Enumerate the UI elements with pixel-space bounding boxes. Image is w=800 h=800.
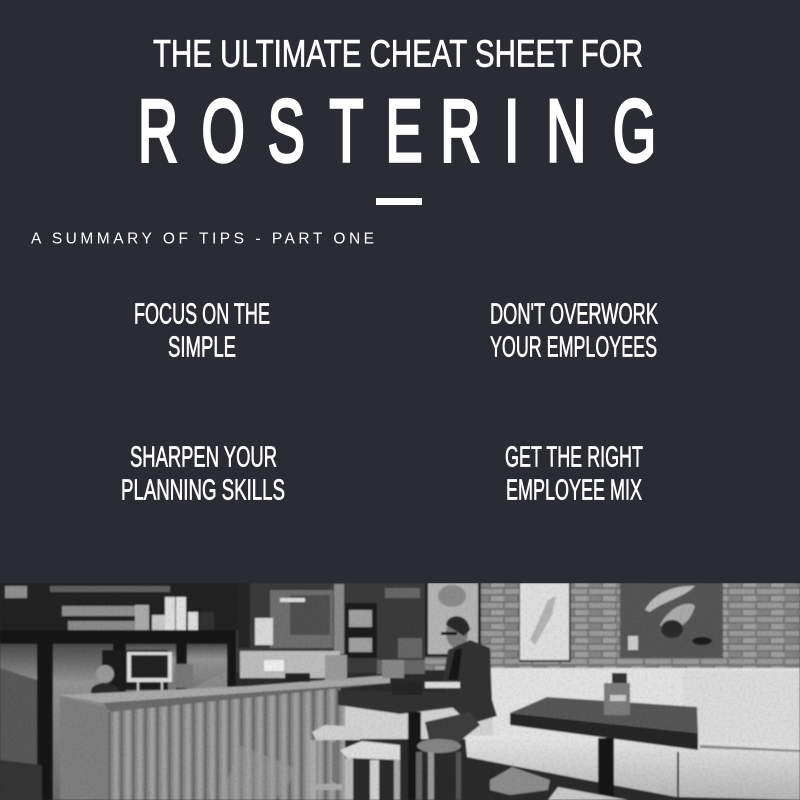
photo grain texture	[0, 583, 800, 800]
left table with items	[338, 660, 482, 800]
tip: sharpen your planning skills	[121, 442, 285, 506]
stools	[310, 725, 400, 800]
heading: rostering: ROSTERING	[138, 81, 656, 180]
napkin holder	[604, 673, 630, 715]
tip: get the right employee mix: GET THE RIGHT	[505, 442, 643, 474]
tip: sharpen your planning skills: PLANNING SKILLS	[121, 474, 285, 506]
poster: sketch	[519, 583, 571, 662]
back shelf area	[235, 583, 425, 674]
fridge cabinet	[0, 630, 236, 800]
tip: get the right employee mix: EMPLOYEE MIX	[506, 474, 642, 506]
poster behind man	[425, 583, 481, 657]
divider bar	[376, 198, 422, 205]
tip: don't overwork your employees	[490, 298, 658, 364]
tip: don't overwork your employees: YOUR EMPLOYEES	[490, 332, 657, 364]
countertop items	[175, 651, 347, 688]
tip: focus on the simple: FOCUS ON THE	[134, 298, 270, 330]
gnome figure	[91, 665, 119, 699]
top shelf with cups	[0, 583, 238, 632]
tip: focus on the simple: SIMPLE	[168, 332, 236, 364]
bar stool and floor cushions	[416, 739, 628, 800]
right table	[510, 697, 698, 800]
tip: sharpen your planning skills: SHARPEN YOUR	[130, 442, 277, 474]
photo: cafe interior	[0, 583, 800, 800]
subtitle: A SUMMARY OF TIPS - PART ONE	[31, 230, 374, 248]
man at table	[425, 616, 497, 745]
tip: get the right employee mix	[505, 442, 643, 506]
tip: don't overwork your employees: DON'T OVERWORK	[490, 298, 658, 330]
bench seating	[343, 668, 800, 800]
title: THE ULTIMATE CHEAT SHEET FOR	[153, 34, 643, 76]
chalkboard sign	[102, 650, 172, 698]
back wall brick	[425, 583, 800, 670]
bar counter	[60, 675, 390, 800]
poster: abstract	[620, 583, 723, 658]
tip: focus on the simple	[134, 298, 270, 364]
